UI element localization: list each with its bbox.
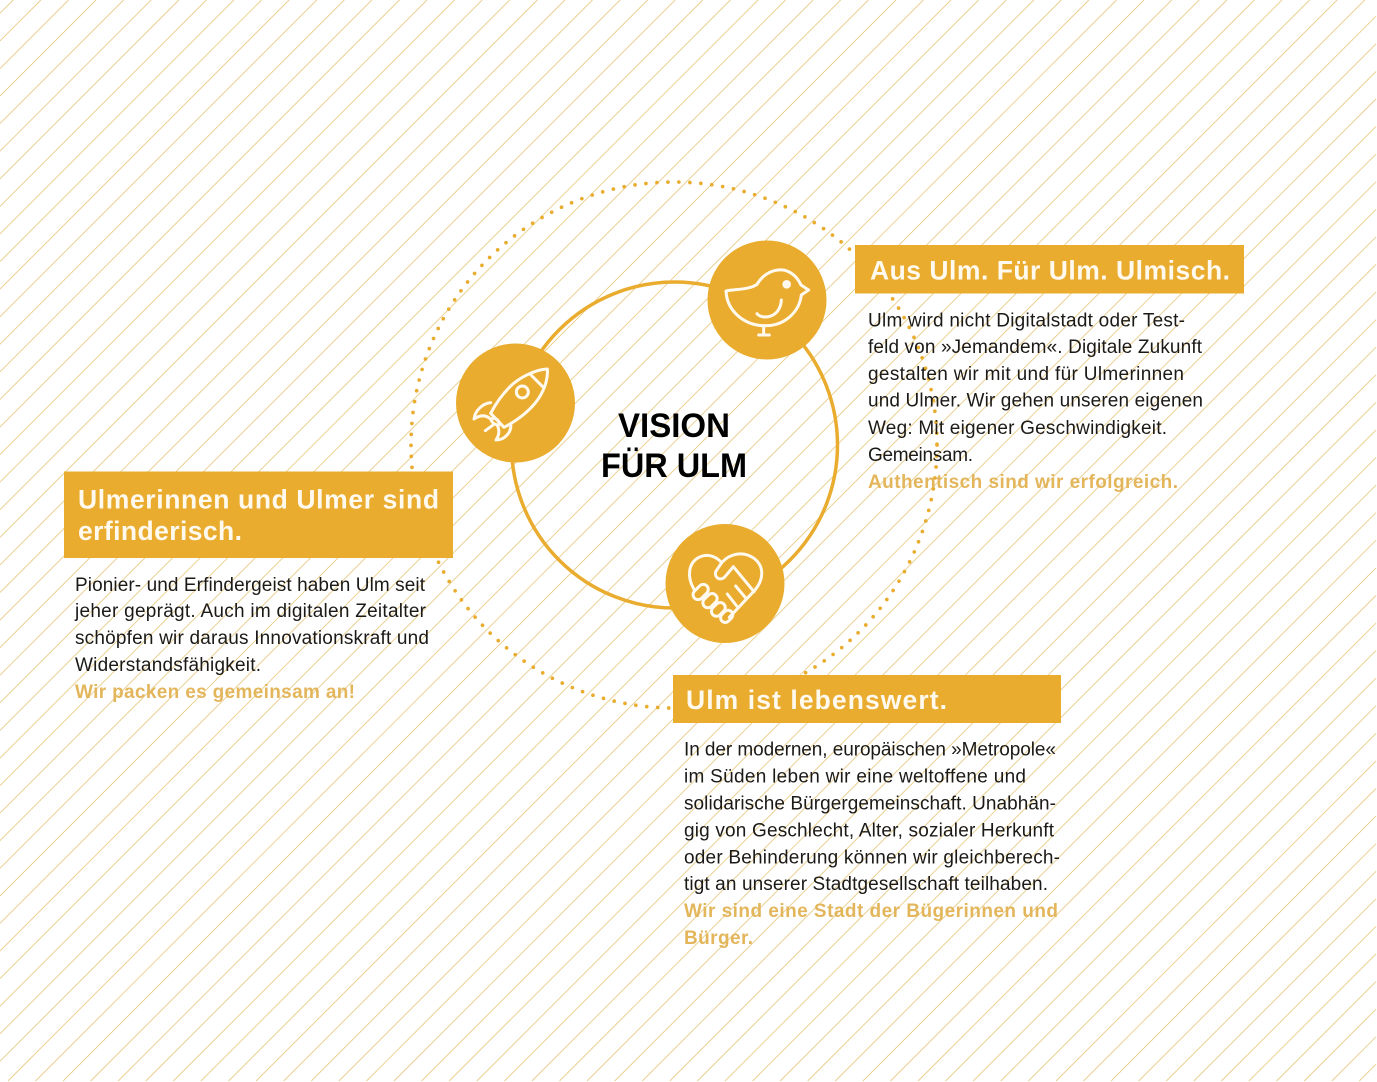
text block: erfinderisch: jeher geprägt. Auch im digitalen Zeitalter bbox=[74, 601, 427, 622]
text block: erfinderisch bbox=[74, 575, 429, 703]
center title bbox=[601, 407, 747, 485]
text block: lebenswert: im Süden leben wir eine weltoffene und bbox=[684, 766, 1026, 787]
text block: Aus Ulm: Weg: Mit eigener Geschwindigkeit. bbox=[868, 418, 1167, 439]
text block: erfinderisch: Widerstandsfähigkeit. bbox=[75, 655, 261, 676]
text block: Aus Ulm: gestalten wir mit und für Ulmerinnen bbox=[868, 364, 1184, 385]
heading: erfinderisch bbox=[64, 472, 453, 558]
text block: Aus Ulm: Ulm wird nicht Digitalstadt oder Test- bbox=[868, 311, 1185, 332]
text block: Aus Ulm: feld von »Jemandem«. Digitale Zukunft bbox=[868, 337, 1203, 358]
solid inner ring bbox=[512, 282, 838, 608]
text block: erfinderisch: Wir packen es gemeinsam an! bbox=[75, 682, 355, 703]
text block: lebenswert: tigt an unserer Stadtgesellschaft teilhaben. bbox=[684, 874, 1048, 895]
text block: lebenswert: In der modernen, europäischen »Metropole« bbox=[684, 739, 1056, 760]
text block: Aus Ulm: Authentisch sind wir erfolgreich. bbox=[868, 472, 1178, 493]
panel: Aus Ulm bbox=[855, 245, 1244, 493]
text block: lebenswert: Bürger. bbox=[684, 928, 753, 949]
heading: erfinderisch: Ulmerinnen und Ulmer sind bbox=[78, 484, 439, 514]
icon: heart handshake bbox=[666, 524, 784, 643]
panel: erfinderisch bbox=[64, 472, 453, 703]
center title: FÜR ULM bbox=[601, 447, 747, 485]
text block: Aus Ulm: und Ulmer. Wir gehen unseren eigenen bbox=[868, 391, 1203, 412]
text block: lebenswert: gig von Geschlecht, Alter, sozialer Herkunft bbox=[684, 820, 1055, 841]
text block: lebenswert: Wir sind eine Stadt der Bügerinnen und bbox=[684, 901, 1058, 922]
dotted outer ring bbox=[411, 182, 937, 708]
heading: lebenswert: Ulm ist lebenswert. bbox=[686, 685, 947, 715]
text block: Aus Ulm bbox=[868, 311, 1203, 493]
icon: bird bbox=[708, 240, 826, 360]
heading: Aus Ulm: Aus Ulm. Für Ulm. Ulmisch. bbox=[870, 256, 1230, 286]
heading: Aus Ulm bbox=[855, 245, 1244, 294]
center title: VISION bbox=[618, 407, 730, 445]
text block: lebenswert: solidarische Bürgergemeinschaft. Unabhän- bbox=[684, 793, 1056, 814]
text block: erfinderisch: Pionier- und Erfindergeist haben Ulm seit bbox=[75, 575, 426, 596]
text block: lebenswert bbox=[684, 739, 1060, 949]
heading: lebenswert bbox=[673, 675, 1061, 723]
text block: Aus Ulm: Gemeinsam. bbox=[868, 445, 973, 466]
text block: erfinderisch: schöpfen wir daraus Innovationskraft und bbox=[75, 628, 429, 649]
panel: lebenswert bbox=[673, 675, 1061, 949]
heading: erfinderisch: erfinderisch. bbox=[78, 516, 242, 546]
icon: rocket bbox=[456, 344, 575, 462]
text block: lebenswert: oder Behinderung können wir gleichberech- bbox=[684, 847, 1060, 868]
